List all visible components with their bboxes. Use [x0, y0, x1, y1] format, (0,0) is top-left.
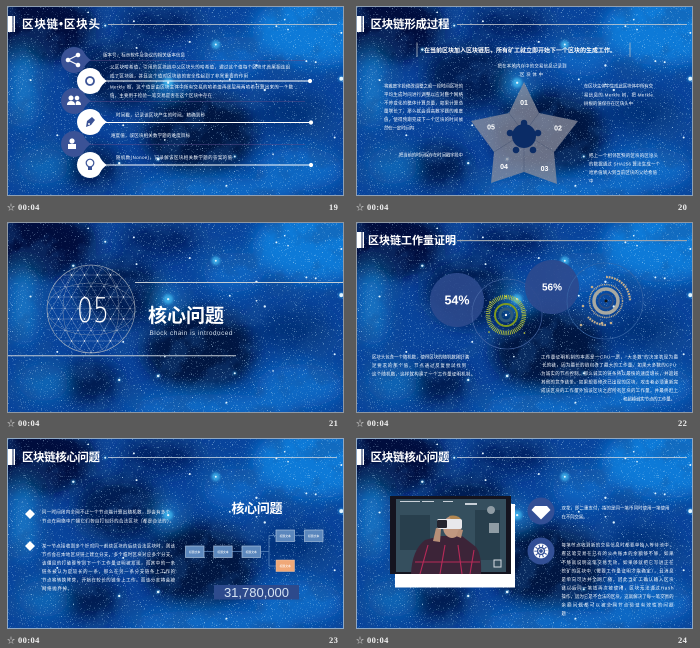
footer: 20 [678, 202, 687, 212]
text blocks: 将难度字段修改调整之前一段时间区块的 [384, 82, 464, 90]
footer: 24 [678, 635, 688, 645]
title bar [8, 449, 15, 465]
title bar [357, 232, 364, 248]
diamond bullets [25, 509, 35, 551]
icon: gear [528, 538, 554, 564]
text blocks: 值，使得预期完成下一个区块的时间依 [384, 116, 464, 123]
text blocks: 不停变化的整体计算总量，如果计算总 [384, 100, 464, 106]
right text: 长的链，因为最长的链包含了最大的工作量。如果大多数的CPU [542, 362, 676, 368]
paragraph text: 节点会在本地区块链上建立分支，多个临时区块对应多个分支。 [42, 551, 175, 558]
text blocks: 易信息的 Merkle 树，把 Merkle [584, 92, 654, 98]
body text: 随机数(Nonce)，记录解该区块相关数学题的答案的值 [116, 154, 233, 161]
wireframe globe [47, 265, 135, 353]
footer: ☆ [356, 203, 364, 212]
54% stat circle [430, 273, 484, 327]
title bar [8, 16, 15, 32]
footer: 23 [329, 635, 338, 645]
text: explanation: 操作，因为它是不合法的区块，这就解决了每一笔交易的 [562, 593, 674, 600]
text: explanation: 看这笔交易在已有的公共账本的余额够不够，如果 [562, 550, 674, 557]
paragraph text: 该僵局的打破要等到下一个工作量证明被发现，而其中的一条 [42, 560, 176, 566]
body text: 值，主要用于检验一笔交易是否在这个区块中存在 [110, 92, 213, 99]
text: explanation: 是单向可达并全网广播，因此当矿工确认输入区块 [562, 576, 674, 583]
text: explanation: 余额问题都可以被全网节点验证有效性的问题 [562, 602, 674, 608]
footer: 21 [329, 418, 338, 428]
footer [356, 418, 687, 428]
text: explanation: 链以后同一笔钱再次被使用，区块无法通过Hash [562, 584, 674, 592]
faint connector lines [89, 60, 305, 144]
title bar [357, 449, 364, 465]
right text: 为诚实的节点控制，那么诚实的链条将以最快的速度增长，并超越 [541, 370, 679, 377]
star numbers: 02 [554, 126, 562, 132]
heading: 区块链•区块头 [22, 17, 100, 31]
footer: ☆ [7, 419, 15, 428]
flowchart: 标题文本 [217, 550, 229, 554]
right text [541, 354, 679, 402]
body text: 时间戳，记录该区块产生的时间，精确到秒 [116, 112, 206, 118]
counter: 31,780,000 [224, 585, 289, 600]
rule lines [8, 282, 343, 356]
text blocks: 中 [589, 178, 593, 184]
right text: 工作量证明机制的本质是一CPU一票，“大多数”的决定表现为最 [541, 354, 679, 360]
right text: 其他的竞争链条。如果想要修改已出现的区块，攻击者必须重新完 [541, 378, 679, 386]
body text: 成了区块链，并且这个值对区块链的安全性起到了非常重要的作用 [110, 72, 248, 80]
panel: slide 21 section cover [0, 206, 380, 428]
footer [356, 635, 688, 645]
heading: 区块链核心问题 [370, 450, 450, 464]
right text: 成该区块的工作量外加该区块之后所有区块的工作量，并最终赶上 [541, 387, 679, 394]
footer [7, 202, 338, 212]
left text [372, 354, 475, 378]
intro statement [417, 42, 630, 57]
text blocks: 把在本地内存中的交易信息记录到 [498, 62, 566, 70]
54% stat circle: 54% [444, 294, 470, 308]
green radial gauge [472, 279, 542, 349]
footer: 00:04 [18, 202, 40, 212]
text blocks: 量增长了，那么就会调高数学题的难度 [384, 108, 464, 114]
right heading: 核心问题 [232, 501, 282, 516]
icon: person pin [61, 131, 91, 157]
56% stat circle [525, 260, 579, 314]
star numbers: 05 [487, 124, 495, 132]
text blocks: 的数据通过 SHA256 算法生成一个 [589, 160, 661, 168]
paragraph text: 某一节点接收到多个针对同一前续区块的后续合法区块时，则该 [42, 542, 176, 550]
footer: 00:04 [18, 418, 40, 428]
section heading: 核心问题 [148, 304, 224, 327]
text blocks: 区块体中 [520, 71, 543, 78]
flowchart: 标题文本 [280, 564, 291, 568]
star puzzle [471, 82, 578, 184]
icon: bulb pin [77, 152, 107, 178]
flowchart: 标题文本 [308, 534, 319, 538]
text blocks: 把当前的时间保存在时间戳字段中 [399, 152, 463, 158]
text: explanation: 每笔节点收到新的交易信息时都要单独入等待池中， [562, 542, 674, 548]
footer: ☆ [356, 419, 364, 428]
star numbers: 01 [520, 100, 528, 107]
paragraph text: 同一时间段内全网不止一个节点能计算出随机数，即会有多个 [42, 508, 171, 516]
text blocks: 哈希值填入到当前区块的父哈希值 [589, 169, 658, 176]
right text: 和超越诚实节点的工作量。 [623, 396, 675, 402]
flowchart: 标题文本 [280, 534, 291, 538]
footer [356, 202, 687, 212]
text blocks: 然在一定时间内 [384, 124, 414, 132]
paragraph text: 链条被认为是较长的一条，那么在另一条分支链条上工作的 [42, 568, 176, 575]
photo: VR headset user [390, 496, 511, 574]
footer: ☆ [7, 636, 15, 645]
text: explanation: 挖矿的区块中（需要工作量证明才能确定），且消息 [562, 568, 674, 574]
grey radial gauge [567, 263, 643, 339]
text blocks: 树根的值保存在区块头中 [584, 100, 633, 107]
star numbers [487, 100, 562, 173]
text: explanation: 题 [562, 611, 566, 617]
footer [7, 635, 338, 645]
left text: 区块头包含一个随机数，使得区块的随机数刚好满 [372, 354, 470, 360]
panel: slide 20 formation process [319, 0, 700, 212]
footer: 00:04 [367, 418, 389, 428]
text: explanation [562, 542, 674, 617]
icon: pen pin [77, 109, 107, 135]
text: double spend: 在不同交易。 [562, 514, 588, 520]
footer: ☆ [7, 203, 15, 212]
star numbers: 04 [500, 164, 508, 171]
text: double spend: 双花，即二重支付，指的是同一笔币同时使用一笔使用 [562, 504, 670, 512]
body text: Merkle 根，这个值是由区块主体中所有交易的哈希值再逐层两两哈希计算出来的一个数 [110, 84, 294, 90]
icon: share pin [61, 47, 91, 73]
left text: 足要求的那个值，节点通过反复尝试找到 [372, 362, 466, 369]
flowchart [186, 530, 323, 572]
panel: slide 22 proof of work [319, 206, 700, 428]
footer: 22 [678, 418, 687, 428]
body text: 难度值，该区块相关数学题的难度目标 [111, 132, 191, 139]
panel: slide 24 double spend [319, 422, 700, 645]
star numbers: 03 [541, 166, 548, 173]
white timeline lines [105, 79, 313, 167]
body text: 版本号，标示软件及协议的相关版本信息 [103, 52, 186, 58]
body text [103, 52, 294, 161]
footer: 00:04 [367, 202, 389, 212]
section subtitle: Block chain is introduced [150, 330, 233, 337]
flowchart: 标题文本 [189, 550, 200, 554]
white photo backing [395, 504, 515, 588]
left text: 这个随机数，这样就构建了一个工作量证明机制。 [372, 370, 475, 378]
title bar [357, 16, 364, 32]
icon: diamond [528, 498, 554, 524]
footer: 19 [329, 202, 338, 212]
flowchart: 标题文本 [246, 550, 257, 554]
text: double spend [562, 504, 670, 520]
text blocks: 在区块主体中生成此区块体中所有交 [584, 82, 654, 90]
heading: 区块链形成过程 [370, 17, 450, 31]
heading: 区块链核心问题 [22, 450, 100, 464]
footer: ☆ [356, 636, 364, 645]
text blocks: 平均生成时间进行调整以应对整个网络 [384, 91, 464, 98]
56% stat circle: 56% [542, 282, 562, 294]
intro statement: 在当前区块加入区块链后，所有矿工就立即开始下一个区块的生成工作。 [424, 46, 616, 54]
footer: 00:04 [18, 635, 40, 645]
gear hole [507, 120, 541, 153]
body text: 父区块哈希值，引用的区块链中父区块头的哈希值，通过这个值每个区块才首尾相连组 [110, 64, 291, 70]
paragraph text [42, 508, 176, 592]
panel: slide 19 block header [0, 0, 380, 212]
section number: 05 [77, 291, 109, 331]
footer [7, 418, 338, 428]
paragraph text: 网络抛弃掉。 [42, 585, 72, 592]
text blocks: 把上一个相邻区块的区块的区块头 [589, 152, 659, 159]
paragraph text: 节点将转换阵营，开始在较长的链条上工作。而该分支将会被 [42, 576, 176, 584]
icon: ring pin [77, 68, 107, 94]
paragraph text: 节点在网络中广播它们各自打包好的合法区块（都是合法的）。 [42, 518, 174, 524]
icon: people pin [61, 88, 91, 114]
panel: slide 23 core issue [0, 422, 380, 645]
text: explanation: 不够就说明这笔交易无效。如果够就把它写进正在 [562, 559, 674, 566]
text blocks [384, 62, 661, 184]
footer: 00:04 [367, 635, 389, 645]
heading: 区块链工作量证明 [368, 233, 456, 247]
